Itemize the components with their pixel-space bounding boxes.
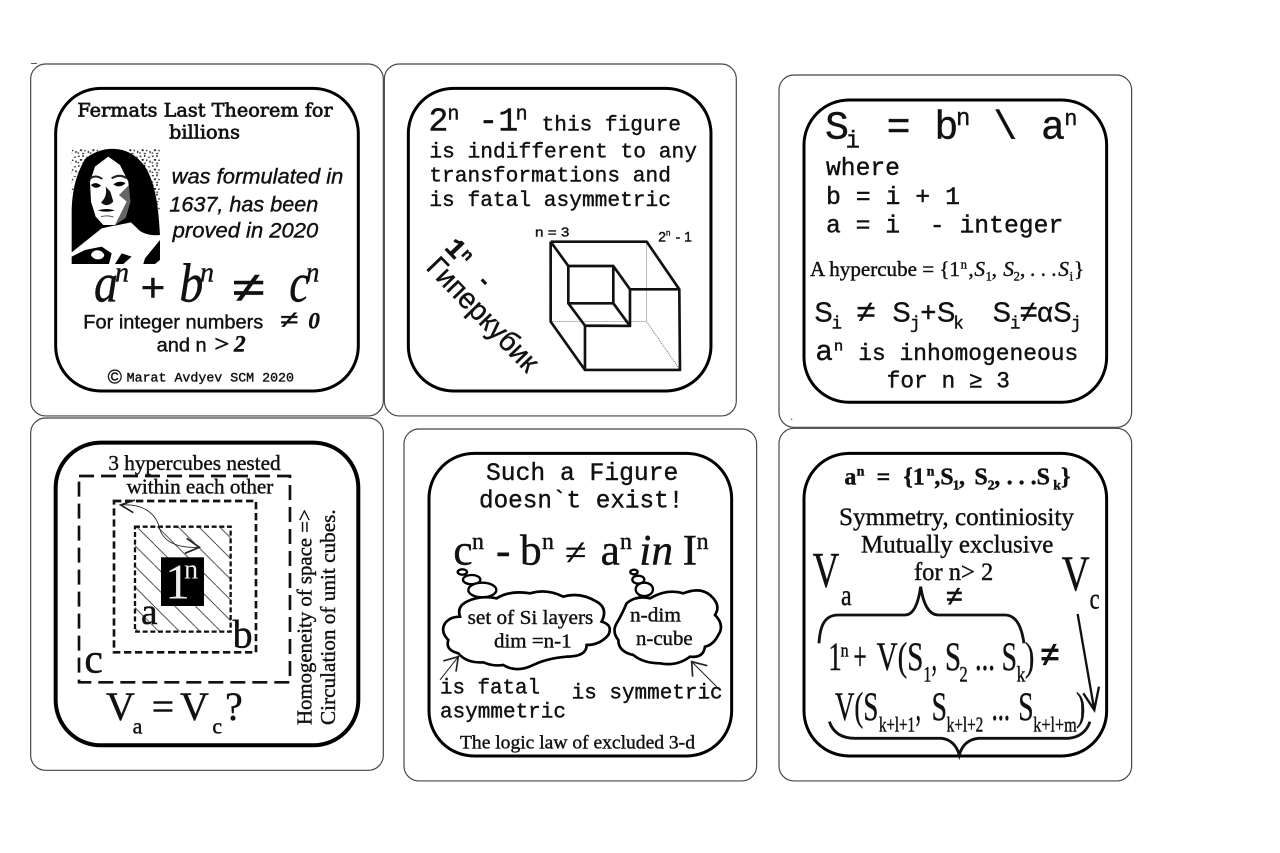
- heading: a^n set: ,: [959, 464, 965, 490]
- formula: S_i = b^n \ a^n: =: [887, 106, 911, 151]
- label: 2^n - 1: - 1: [676, 228, 692, 244]
- heading: [77, 101, 333, 143]
- labels: asymmetric and symmetric: [440, 677, 723, 725]
- formula: second volume: [835, 684, 1085, 737]
- formula: inequalities: j: [1071, 315, 1081, 334]
- text: figure description: [429, 141, 697, 213]
- formula: c^n - b^n != a^n in I^n: c: [453, 526, 473, 574]
- formula: V_a = V_c?: V: [180, 684, 209, 729]
- brace: top: [819, 587, 1024, 643]
- formula: S_i = b^n \ a^n: n: [1064, 107, 1078, 132]
- text: symmetry and exclusivity: Mutually exclusive: [861, 531, 1053, 559]
- panel 4 inner frame: [56, 443, 358, 745]
- formula: a^n + b^n != c^n: ≠: [233, 263, 265, 310]
- heading: a^n set: ,: [994, 464, 1000, 490]
- formula: first volume: ,: [932, 634, 937, 679]
- formula: hypercube set: 1: [986, 270, 992, 284]
- formula: hypercube set: S: [1003, 257, 1014, 281]
- brace: bottom: [829, 722, 1090, 755]
- formula: second volume: S: [932, 684, 947, 729]
- formula: second volume: ...: [992, 684, 1010, 729]
- heading: Fermats Last Theorem for: [77, 101, 333, 122]
- formula: a^n + b^n != c^n: n: [115, 258, 129, 289]
- formula: hypercube set: }: [1074, 257, 1084, 281]
- heading: nested hypercubes: [108, 451, 281, 498]
- formula: inequalities: i: [832, 315, 842, 334]
- text: integer numbers condition: 0: [308, 308, 320, 334]
- text: where definitions: where: [826, 155, 900, 183]
- formula: first volume: ): [1025, 634, 1034, 679]
- panel 3 inner frame: [804, 100, 1107, 402]
- heading: a^n set: 2: [988, 479, 995, 494]
- rotated text: homogeneity of space: Circulation of unit cubes.: [316, 509, 340, 725]
- formula: inequalities: i: [1010, 315, 1020, 334]
- panel 2 inner frame: [408, 88, 711, 391]
- formula: inequalities: S: [814, 297, 833, 328]
- formula: a^n + b^n != c^n: b: [179, 253, 203, 314]
- heading: 2^n - 1^n this figure: 2: [428, 104, 448, 142]
- formula: a^n + b^n != c^n: n: [200, 258, 214, 289]
- label: V_c: c: [1090, 583, 1100, 615]
- formula: V_a = V_c?: a: [133, 713, 143, 738]
- rotated label: hypercube: Гиперкубик: [420, 250, 546, 379]
- panel 1 inner frame: [56, 88, 358, 391]
- panel: a^n set and volumes: [779, 428, 1132, 781]
- formula: hypercube set: n: [961, 258, 968, 272]
- heading: nested hypercubes: within each other: [127, 474, 273, 498]
- heading: a^n set: ,S: [934, 464, 954, 490]
- formula: c^n - b^n != a^n in I^n: n: [472, 529, 484, 555]
- cloud text: dim =n-1: [494, 631, 572, 653]
- rotated label: 1^n: [437, 233, 498, 295]
- formula: c^n - b^n != a^n in I^n: a: [601, 526, 620, 574]
- panel 5 outer frame: [404, 429, 757, 781]
- labels: asymmetric and symmetric: asymmetric: [440, 702, 566, 725]
- cloud text: set of Si layers: [468, 607, 594, 629]
- text: integer numbers condition: ≠: [280, 304, 299, 334]
- text: inhomogeneous: for n ≥ 3: [887, 368, 1010, 394]
- formula: c^n - b^n != a^n in I^n: in: [639, 526, 673, 574]
- cloud text: [468, 605, 693, 653]
- rotated label: 1^n: 1: [437, 233, 471, 267]
- formula: a^n + b^n != c^n: [94, 253, 319, 314]
- dashed square b: [114, 501, 256, 652]
- heading: Such a Figure: [486, 460, 678, 488]
- icon: portrait of Fermat: [72, 148, 160, 264]
- panel: 2^n - 1^n figure: [384, 64, 736, 416]
- unit cube 1^n: n: [184, 554, 198, 585]
- heading: 2^n - 1^n this figure: this figure: [542, 114, 681, 138]
- text: integer numbers condition: and n: [157, 336, 207, 357]
- formula: first volume: 2: [959, 662, 968, 687]
- formula: second volume: V(S: [835, 684, 878, 729]
- heading: [479, 460, 683, 516]
- copyright: Marat Avdyev SCM 2020: [127, 372, 294, 387]
- formula: c^n - b^n != a^n in I^n: n: [620, 529, 632, 555]
- formula: a^n + b^n != c^n: c: [289, 253, 309, 314]
- panel 6 inner frame: [804, 453, 1107, 756]
- heading: a^n set: a: [844, 464, 856, 490]
- formula: hypercube set: [810, 257, 1084, 284]
- formula: first volume: ≠: [1041, 637, 1059, 674]
- panel 3 outer frame: [779, 75, 1132, 427]
- formula: hypercube set: A hypercube = {1: [810, 257, 960, 281]
- not-equal sign: ≠: [946, 581, 962, 611]
- text: integer numbers condition: 2: [233, 332, 246, 358]
- text: figure description: is indifferent to any: [429, 141, 697, 165]
- formula: c^n - b^n != a^n in I^n: n: [542, 529, 554, 555]
- heading: 2^n - 1^n this figure: n: [516, 103, 528, 126]
- text: figure description: transformations and: [429, 165, 671, 189]
- text: figure description: is fatal asymmetric: [429, 189, 671, 213]
- labels a b c: [84, 592, 253, 682]
- formula: a^n + b^n != c^n: a: [94, 253, 118, 314]
- formula: inequalities: S: [892, 297, 911, 328]
- formula: first volume: V(S: [877, 634, 923, 679]
- text: where definitions: [826, 155, 1063, 240]
- heading: a^n set: k: [1053, 479, 1061, 494]
- text: where definitions: b = i + 1: [826, 184, 960, 212]
- formula: inequalities: S: [937, 297, 955, 328]
- panel: such a figure doesn't exist: [404, 429, 757, 781]
- text: integer numbers condition: [83, 304, 320, 358]
- speck: [791, 419, 792, 420]
- formula: S_i = b^n \ a^n: S: [825, 106, 849, 151]
- text: inhomogeneous: is inhomogeneous: [858, 341, 1078, 367]
- thought cloud: Si layers: [443, 569, 610, 669]
- label: V_a: V: [813, 542, 839, 598]
- arrows to clouds: [440, 657, 717, 687]
- labels: asymmetric and symmetric: is fatal: [440, 677, 540, 700]
- heading: doesn`t exist!: [479, 488, 683, 516]
- formula: second volume: k+l+2: [947, 715, 983, 737]
- formula: inequalities: k: [953, 315, 964, 334]
- cloud text: n-cube: [636, 628, 693, 650]
- labels a b c: c: [84, 636, 103, 682]
- formula: first volume: ...: [975, 634, 995, 679]
- hatched dashed square a: [135, 527, 231, 632]
- panel: S_i definition: [779, 75, 1132, 427]
- panel: nested hypercubes: [31, 418, 383, 770]
- formula: c^n - b^n != a^n in I^n: [453, 526, 709, 574]
- formula: hypercube set: . . .: [1030, 257, 1057, 281]
- rotated label: 1^n: -: [473, 268, 497, 292]
- heading: a^n set: S: [974, 464, 988, 490]
- text: integer numbers condition: >: [214, 332, 230, 358]
- formula: hypercube set: 2: [1014, 270, 1020, 284]
- text: inhomogeneous: n: [834, 339, 843, 355]
- heading: a^n set: n: [857, 465, 865, 480]
- formula: S_i = b^n \ a^n: b: [934, 106, 958, 151]
- text: inhomogeneous: [816, 335, 1078, 394]
- heading: a^n set: n: [927, 465, 935, 480]
- heading: a^n set: }: [1061, 464, 1070, 490]
- text: formulated and proved: was formulated in: [172, 164, 343, 188]
- formula: c^n - b^n != a^n in I^n: ≠: [565, 531, 586, 572]
- dashed square c: [79, 476, 290, 682]
- text: symmetry and exclusivity: [839, 503, 1074, 586]
- footer: logic law: The logic law of excluded 3-d: [460, 732, 695, 753]
- formula: a^n + b^n != c^n: n: [306, 258, 319, 289]
- label: n = 3: n = 3: [535, 225, 569, 240]
- heading: a^n set: 1: [953, 479, 960, 494]
- formula: V_a = V_c?: [106, 684, 243, 738]
- labels: asymmetric and symmetric: is symmetric: [572, 682, 723, 705]
- formula: c^n - b^n != a^n in I^n: n: [697, 529, 709, 555]
- formula: second volume: k+l+1: [879, 715, 915, 737]
- label: 2^n - 1: [658, 228, 692, 244]
- label: 2^n - 1: n: [666, 228, 670, 237]
- text: inhomogeneous: a: [816, 335, 832, 367]
- heading: billions: [169, 122, 240, 143]
- formula: S_i = b^n \ a^n: n: [956, 106, 970, 133]
- heading: a^n set: =: [877, 464, 890, 490]
- formula: inequalities: [814, 296, 1081, 334]
- formula: c^n - b^n != a^n in I^n: I: [683, 526, 697, 574]
- formula: first volume: +: [853, 634, 867, 679]
- formula: second volume: ): [1076, 684, 1085, 729]
- formula: first volume: S: [945, 634, 961, 679]
- arrow: V_c to second volume: [1078, 614, 1099, 710]
- rotated text: homogeneity of space: Homogeneity of space =>: [293, 509, 317, 725]
- formula: inequalities: +: [920, 297, 936, 328]
- formula: c^n - b^n != a^n in I^n: b: [520, 526, 542, 574]
- formula: second volume: S: [1018, 684, 1034, 729]
- unit cube 1^n: 1: [165, 553, 190, 609]
- formula: hypercube set: i: [1070, 270, 1074, 284]
- formula: a^n + b^n != c^n: +: [141, 266, 165, 310]
- thought cloud: n-cube: [615, 570, 721, 664]
- text: symmetry and exclusivity: for n> 2: [914, 558, 993, 586]
- panel 4 outer frame: [31, 418, 383, 770]
- heading: a^n set: . . .S: [1007, 464, 1050, 490]
- formula: hypercube set: ,: [1020, 257, 1025, 281]
- formula: hypercube set: ,: [968, 257, 974, 281]
- panel 1 outer frame: [31, 64, 383, 416]
- formula: inequalities: S: [1053, 297, 1072, 328]
- formula: V_a = V_c?: V: [106, 684, 135, 729]
- formula: hypercube set: S: [1058, 257, 1069, 281]
- formula: inequalities: ≠: [857, 296, 875, 329]
- formula: hypercube set: S: [974, 257, 985, 281]
- formula: first volume: 1: [923, 662, 931, 687]
- formula: S_i = b^n \ a^n: [825, 106, 1078, 155]
- formula: inequalities: α: [1037, 297, 1053, 328]
- formula: first volume: 1: [828, 634, 842, 679]
- heading: nested hypercubes: 3 hypercubes nested: [108, 451, 281, 475]
- rotated text: homogeneity of space: [293, 509, 340, 725]
- formula: first volume: n: [841, 641, 849, 662]
- small mark at top left: [31, 62, 37, 64]
- unit cube 1^n: [161, 553, 204, 609]
- formula: V_a = V_c?: =: [152, 684, 174, 729]
- text: symmetry and exclusivity: Symmetry, continiosity: [839, 503, 1074, 531]
- panel 6 outer frame: [779, 428, 1132, 781]
- heading: 2^n - 1^n this figure: -1: [478, 104, 518, 142]
- formula: second volume: ,: [916, 684, 921, 729]
- label: V_a: a: [841, 580, 852, 612]
- formula: c^n - b^n != a^n in I^n: -: [496, 526, 510, 574]
- heading: 2^n - 1^n this figure: [428, 103, 681, 142]
- panel: Fermat's Last Theorem: [31, 64, 383, 416]
- label: 2^n - 1: 2: [658, 228, 666, 244]
- formula: inequalities: ≠: [1020, 296, 1037, 329]
- diagram: cube with corner cut out: [551, 242, 680, 370]
- heading: a^n set: [844, 464, 1070, 494]
- text: formulated and proved: proved in 2020: [172, 219, 318, 243]
- formula: V_a = V_c?: ?: [225, 684, 243, 729]
- labels a b c: b: [233, 612, 253, 657]
- formula: inequalities: S: [993, 297, 1011, 328]
- formula: S_i = b^n \ a^n: a: [1041, 106, 1065, 151]
- copyright: ©: [108, 367, 122, 388]
- panel 5 inner frame: [429, 453, 732, 756]
- text: integer numbers condition: For integer numbers: [83, 312, 263, 333]
- formula: S_i = b^n \ a^n: i: [846, 128, 860, 155]
- formula: S_i = b^n \ a^n: \: [993, 106, 1017, 151]
- heading: a^n set: {1: [903, 464, 925, 490]
- panel 2 outer frame: [384, 64, 736, 416]
- copyright: [108, 367, 294, 388]
- cloud text: n-dim: [630, 605, 681, 627]
- formula: V_a = V_c?: c: [212, 713, 222, 738]
- formula: second volume: k+l+m: [1033, 715, 1077, 737]
- formula: hypercube set: ,: [992, 257, 997, 281]
- formula: inequalities: j: [910, 315, 920, 334]
- text: formulated and proved: 1637, has been: [169, 193, 318, 217]
- arrow: circulation: [121, 500, 199, 553]
- heading: 2^n - 1^n this figure: n: [447, 103, 459, 126]
- label: V_c: V: [1062, 545, 1090, 601]
- labels a b c: a: [141, 592, 158, 633]
- formula: first volume: [828, 634, 1059, 687]
- text: formulated and proved: [169, 164, 343, 243]
- rotated label: 1^n: n: [457, 246, 477, 265]
- formula: first volume: S: [1002, 634, 1017, 679]
- formula: first volume: k: [1017, 662, 1025, 687]
- text: where definitions: a = i - integer: [826, 212, 1063, 240]
